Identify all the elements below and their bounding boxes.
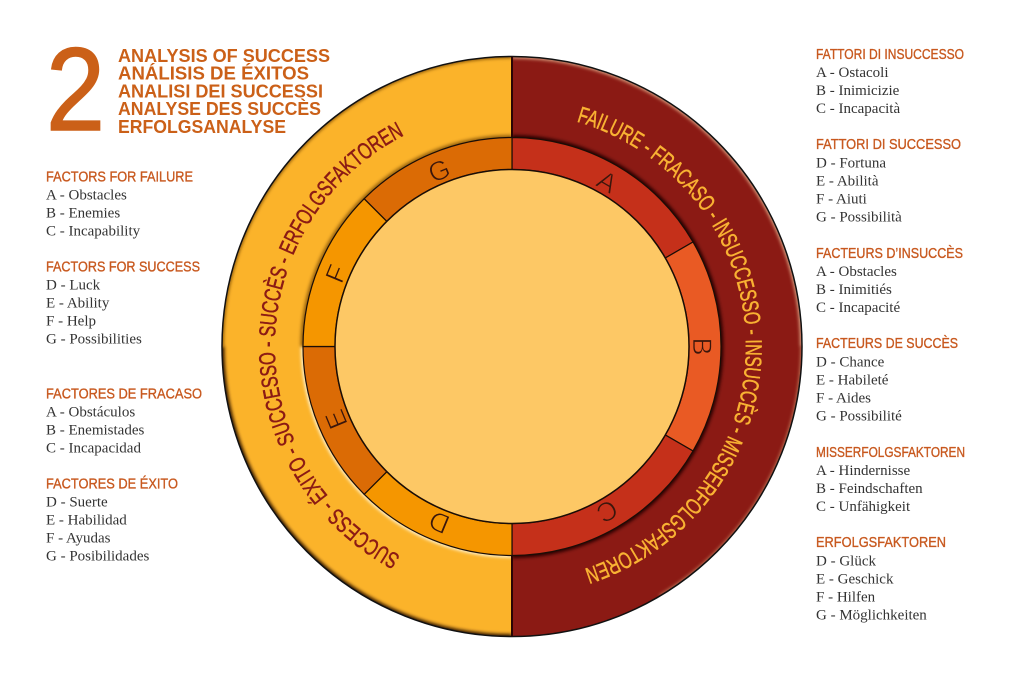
erfolgsfaktoren: E - Geschick	[816, 572, 894, 588]
inner ring segments	[303, 138, 721, 556]
misserfolgsfaktoren: MISSERFOLGSFAKTOREN	[816, 445, 965, 461]
factors for success: G - Possibilities	[46, 332, 142, 348]
segment G	[364, 138, 512, 221]
fattori di successo: FATTORI DI SUCCESSO	[816, 137, 961, 153]
segment C	[512, 435, 693, 556]
erfolgsfaktoren: G - Möglichkeiten	[816, 608, 927, 624]
letter G: G	[424, 153, 455, 189]
factors for failure: B - Enemies	[46, 206, 120, 222]
inner ring letters	[319, 153, 717, 540]
fattori di insuccesso: C - Incapacità	[816, 101, 900, 117]
facteurs de succes: FACTEURS DE SUCCÈS	[816, 335, 958, 352]
erfolgsfaktoren	[816, 535, 946, 624]
segment E	[303, 346, 387, 494]
facteurs de succes: G - Possibilité	[816, 408, 902, 424]
factores de fracaso: A - Obstáculos	[46, 404, 135, 420]
title block in five languages: ANALISI DEI SUCCESSI	[118, 80, 323, 101]
title block in five languages: ANÁLISIS DE ÉXITOS	[118, 63, 309, 84]
outer ring: failure half	[512, 56, 802, 636]
letter C: C	[591, 493, 623, 529]
fattori di insuccesso: B - Inimicizie	[816, 83, 900, 99]
outer ring label: failure: FAILURE - FRACASO - INSUCCESSO - INSUCCÈS - MISSERFOLGSFAKTOREN	[578, 106, 762, 584]
title number 2: 2	[46, 24, 105, 156]
outer ring outlines and seam	[222, 56, 802, 636]
facteurs de succes: E - Habileté	[816, 372, 889, 388]
fattori di successo: F - Aiuti	[816, 192, 867, 208]
facteurs d'insucces: FACTEURS D’INSUCCÈS	[816, 245, 963, 262]
facteurs de succes: F - Aides	[816, 390, 871, 406]
factores de exito	[46, 476, 178, 564]
segment B	[665, 242, 721, 451]
segment D	[364, 472, 512, 556]
factores de fracaso: B - Enemistades	[46, 422, 144, 438]
factors for success: E - Ability	[46, 296, 110, 312]
factors for failure: FACTORS FOR FAILURE	[46, 170, 193, 186]
factors for failure: A - Obstacles	[46, 188, 127, 204]
erfolgsfaktoren: F - Hilfen	[816, 590, 876, 606]
fattori di insuccesso	[816, 47, 964, 117]
fattori di successo: E - Abilità	[816, 174, 879, 190]
fattori di insuccesso: A - Ostacoli	[816, 65, 888, 81]
segment A	[512, 138, 693, 258]
factors for success	[46, 260, 200, 348]
letter D: D	[425, 504, 454, 540]
fattori di successo	[816, 137, 961, 226]
title block in five languages	[118, 45, 330, 137]
factores de fracaso: FACTORES DE FRACASO	[46, 386, 202, 402]
facteurs d'insucces: C - Incapacité	[816, 300, 900, 316]
segment F	[303, 199, 387, 346]
letter E: E	[319, 405, 354, 433]
fattori di successo: D - Fortuna	[816, 156, 886, 172]
facteurs d'insucces: A - Obstacles	[816, 264, 897, 280]
central disc	[335, 170, 689, 524]
factores de exito: FACTORES DE ÉXITO	[46, 476, 178, 492]
factors for success: F - Help	[46, 314, 96, 330]
misserfolgsfaktoren: B - Feindschaften	[816, 481, 923, 497]
factores de exito: F - Ayudas	[46, 530, 111, 546]
factores de exito: E - Habilidad	[46, 512, 127, 528]
facteurs d'insucces: B - Inimitiés	[816, 282, 892, 298]
factores de exito: D - Suerte	[46, 494, 108, 510]
misserfolgsfaktoren: A - Hindernisse	[816, 463, 910, 479]
factors for failure: C - Incapability	[46, 224, 141, 240]
fattori di insuccesso: FATTORI DI INSUCCESSO	[816, 47, 964, 63]
factores de fracaso	[46, 386, 202, 456]
factores de fracaso: C - Incapacidad	[46, 440, 141, 456]
right text column: factors in Italian, French and German	[816, 47, 965, 624]
circular diagram	[221, 56, 803, 638]
left text column: factors in English and Spanish	[46, 170, 202, 564]
facteurs de succes: D - Chance	[816, 354, 885, 370]
letter B: B	[687, 337, 717, 356]
outer ring: success half	[222, 56, 512, 636]
factors for success: D - Luck	[46, 278, 101, 294]
erfolgsfaktoren: ERFOLGSFAKTOREN	[816, 535, 946, 551]
factors for failure	[46, 170, 193, 240]
letter A: A	[592, 164, 622, 199]
factors for success: FACTORS FOR SUCCESS	[46, 260, 200, 276]
title block in five languages: ANALYSIS OF SUCCESS	[118, 45, 330, 66]
misserfolgsfaktoren	[816, 445, 965, 515]
title block in five languages: ANALYSE DES SUCCÈS	[118, 98, 321, 119]
facteurs d'insucces	[816, 245, 963, 316]
erfolgsfaktoren: D - Glück	[816, 554, 876, 570]
fattori di successo: G - Possibilità	[816, 210, 902, 226]
title block in five languages: ERFOLGSANALYSE	[118, 116, 286, 137]
facteurs de succes	[816, 335, 958, 424]
factores de exito: G - Posibilidades	[46, 548, 149, 564]
outer ring label: success: SUCCESS - ÉXITO - SUCCESSO - SUCCÈS - ERFOLGSFAKTOREN	[258, 122, 404, 568]
letter F: F	[319, 260, 353, 287]
misserfolgsfaktoren: C - Unfähigkeit	[816, 499, 911, 515]
